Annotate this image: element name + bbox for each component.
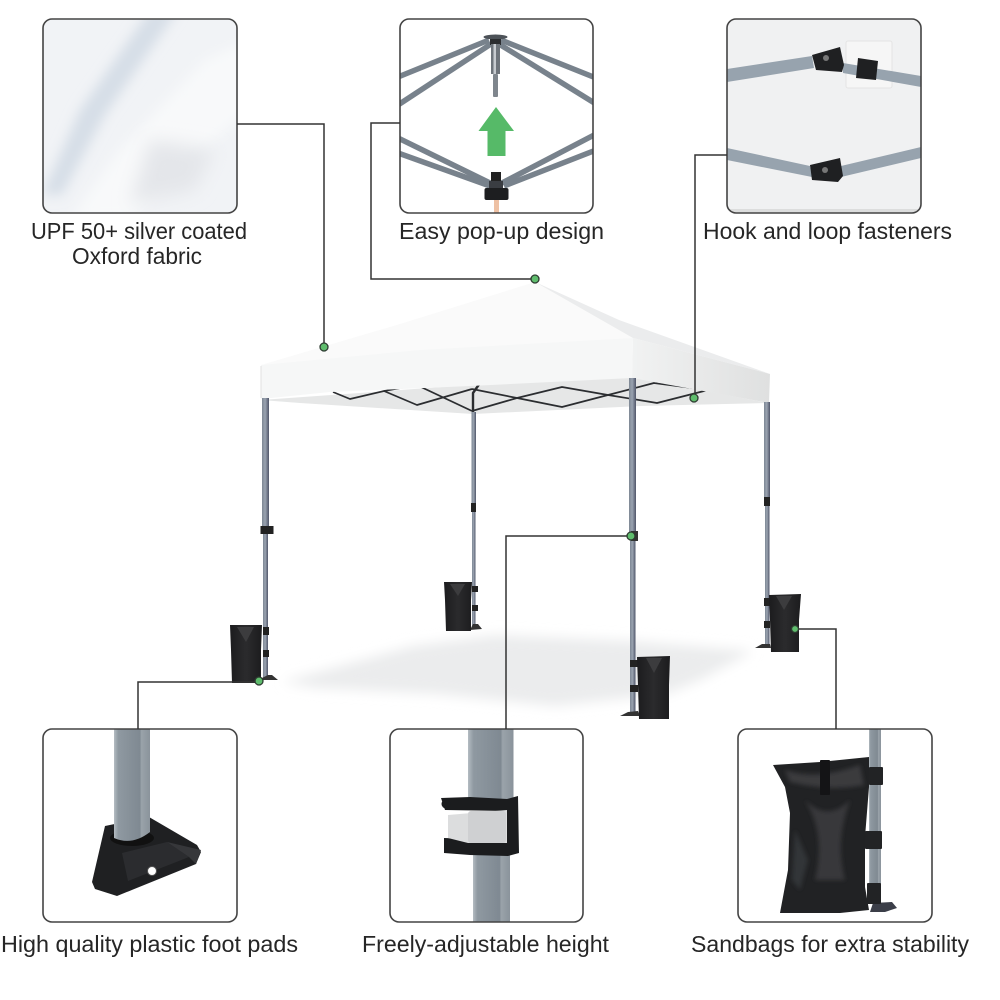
panel: sandbag bbox=[738, 729, 932, 922]
panel: pop-up mechanism bbox=[398, 19, 596, 213]
ground shadow bbox=[282, 635, 753, 706]
panel: silver coated fabric bbox=[44, 20, 236, 212]
pole foot bbox=[870, 902, 897, 912]
connector: pop-up bbox=[371, 123, 535, 279]
label: fabric: UPF 50+ silver coated bbox=[31, 218, 247, 244]
canopy roof bbox=[261, 282, 633, 365]
icon: green up arrow bbox=[478, 107, 514, 156]
canopy front valance bbox=[261, 338, 633, 399]
connector: height bbox=[506, 536, 631, 729]
label: sandbags: Sandbags for extra stability bbox=[691, 931, 969, 957]
panel: adjustable height clamp bbox=[390, 729, 583, 923]
back center pole and sandbag bbox=[444, 412, 482, 631]
label: fasteners: Hook and loop fasteners bbox=[703, 218, 952, 244]
clamp latch bbox=[448, 810, 507, 843]
aluminium pole bbox=[114, 729, 150, 841]
telescoping pole bbox=[468, 729, 514, 923]
canopy truss frame bbox=[333, 383, 708, 412]
connector: foot pads bbox=[138, 682, 259, 729]
connector: fasteners bbox=[695, 155, 727, 398]
connector: sandbags bbox=[795, 629, 836, 729]
right pole and sandbag bbox=[755, 402, 801, 652]
canopy right valance bbox=[632, 338, 770, 403]
canopy underside bbox=[261, 377, 768, 414]
top hub and pin bbox=[484, 34, 508, 97]
fastener straps bbox=[810, 47, 878, 182]
transparent patch bbox=[846, 41, 892, 88]
label: height: Freely-adjustable height bbox=[362, 931, 610, 957]
connector: fabric bbox=[237, 124, 324, 347]
marker dots bbox=[255, 275, 798, 685]
clamp body bbox=[441, 796, 519, 856]
sandbag body bbox=[773, 757, 869, 913]
label: pop-up: Easy pop-up design bbox=[399, 218, 604, 244]
panel: plastic foot pad bbox=[43, 729, 237, 922]
left pole and sandbag bbox=[230, 398, 278, 683]
foot pad base bbox=[92, 817, 201, 896]
panel: hook and loop fasteners bbox=[727, 19, 921, 214]
rails bbox=[727, 56, 921, 177]
straps bbox=[865, 767, 883, 904]
upper frame struts bbox=[398, 40, 596, 105]
label: fabric line 2: Oxford fabric bbox=[72, 243, 202, 269]
label: foot pads: High quality plastic foot pads bbox=[1, 931, 298, 957]
lower frame struts bbox=[398, 134, 596, 186]
canopy tent bbox=[261, 282, 770, 414]
bottom hub bbox=[484, 172, 508, 213]
front pole and sandbag bbox=[620, 378, 670, 719]
pole bbox=[869, 730, 881, 884]
